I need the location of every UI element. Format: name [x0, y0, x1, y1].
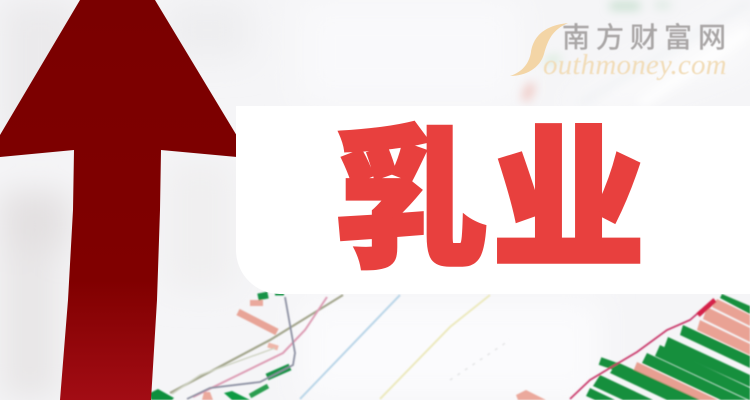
- candlesticks and moving averages, right: [516, 294, 750, 400]
- watermark: Chinese brand name: 南方财富网: [562, 22, 732, 53]
- white title panel: [236, 106, 750, 294]
- title: 乳业: [335, 116, 649, 287]
- watermark: english domain: outhmoney.com: [543, 49, 727, 81]
- candlesticks and moving averages, left: [150, 293, 510, 400]
- faint blurred chart traces at the top: [525, 2, 750, 104]
